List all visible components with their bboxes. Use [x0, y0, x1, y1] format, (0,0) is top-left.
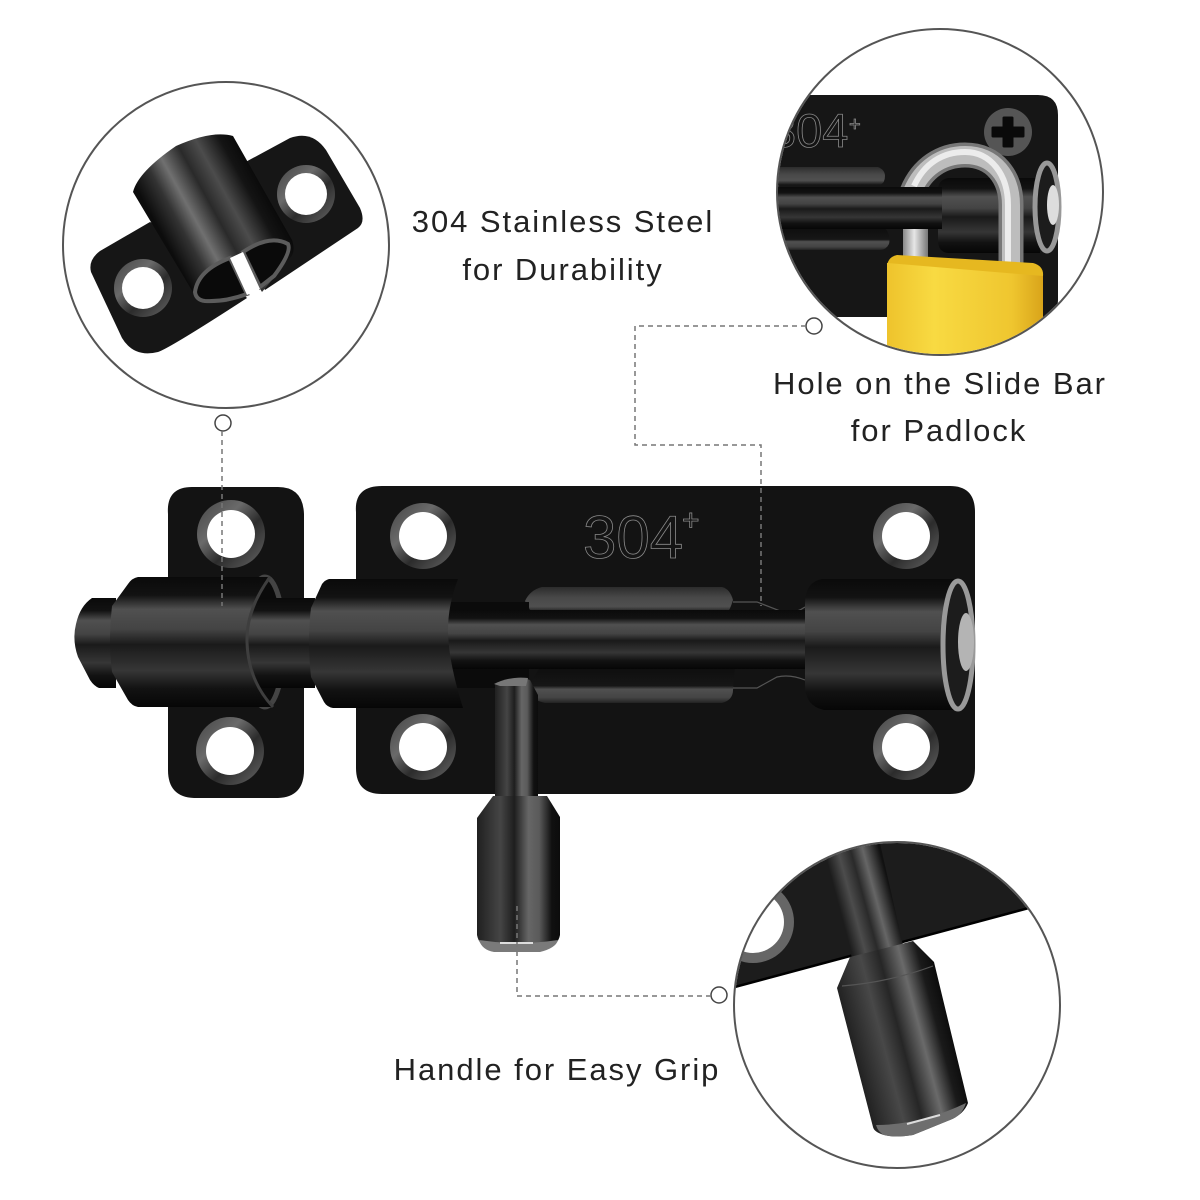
bar end ring close-up	[1035, 163, 1059, 251]
text: stainless steel label: 304 Stainless Steel	[412, 204, 714, 239]
icon: plate hole close-up	[741, 892, 794, 963]
icon: plate hole top left	[390, 503, 456, 569]
lower guide slot	[527, 667, 735, 703]
grip shoulder line	[842, 966, 933, 986]
text: padlock label: for Padlock	[851, 413, 1027, 448]
keeper ring lip	[247, 577, 273, 707]
handle grip close-up	[837, 941, 968, 1136]
slide bar close-up	[770, 187, 942, 229]
text: padlock label: Hole on the Slide Bar	[773, 366, 1107, 401]
bar sleeve close-up	[938, 178, 1040, 253]
upper slot relief line	[733, 602, 805, 612]
keeper tube	[133, 134, 294, 303]
handle stem close-up	[827, 844, 903, 956]
callout connector: keeper	[215, 415, 231, 606]
plate close-up	[770, 95, 1058, 317]
keeper wing right	[240, 136, 363, 290]
panel: detail circle keeper	[63, 82, 389, 408]
handle tip highlight close-up	[907, 1115, 940, 1124]
panel: detail circle handle	[712, 830, 1060, 1168]
plate stamp close-up: 304	[770, 104, 848, 157]
panel: main mounting plate	[356, 486, 975, 794]
padlock body	[887, 263, 1043, 360]
panel: strike plate	[168, 487, 304, 798]
keeper hole left	[114, 259, 172, 317]
plate stamp: 304	[583, 504, 683, 571]
icon: plate hole bottom left	[390, 714, 456, 780]
plate stamp close-up: +	[849, 114, 861, 136]
upper guide slot	[525, 587, 733, 613]
plate close-up	[736, 843, 1027, 986]
handle tip	[479, 940, 558, 952]
handle tip highlight	[500, 942, 533, 944]
handle tip close-up	[876, 1103, 966, 1136]
bolt shaft front	[245, 598, 315, 688]
rear sleeve	[805, 579, 958, 710]
padlock body top	[888, 255, 1044, 276]
handle grip	[477, 796, 560, 948]
keeper hollow	[195, 240, 289, 301]
keeper ring back	[246, 577, 284, 707]
illustration: sliding bolt	[74, 577, 974, 952]
keeper wing left	[90, 222, 247, 353]
callout connector: handle	[517, 906, 727, 1003]
bolt shaft main	[440, 610, 810, 669]
lower slot relief line	[733, 676, 805, 688]
keeper hole right	[277, 165, 335, 223]
icon: plate hole top right	[873, 503, 939, 569]
icon: plate hole bottom right	[873, 714, 939, 780]
plate stamp close-up	[784, 114, 860, 148]
bolt shaft shadow	[445, 602, 529, 688]
plate stamp: +	[682, 504, 700, 537]
handle stem	[495, 678, 538, 800]
keeper slot	[230, 252, 260, 295]
central sleeve	[309, 579, 463, 708]
handle screw	[494, 678, 528, 686]
bolt front collar	[110, 577, 272, 707]
plate edge close-up	[736, 908, 1028, 988]
bolt tip	[74, 598, 116, 688]
rear end cap	[943, 581, 974, 709]
callout connector: padlock	[635, 318, 822, 606]
text: stainless steel label: for Durability	[462, 252, 664, 287]
padlock shackle	[912, 152, 1011, 270]
lower slot close-up	[782, 228, 890, 250]
panel: detail circle padlock	[770, 29, 1103, 360]
icon: screw head	[984, 108, 1032, 156]
text: padlock label	[773, 366, 1107, 448]
text: handle label: Handle for Easy Grip	[394, 1052, 720, 1087]
icon: strike plate lower hole	[196, 717, 264, 785]
upper slot close-up	[770, 167, 885, 185]
icon: strike plate upper hole	[197, 500, 265, 568]
text: stainless steel label	[412, 204, 714, 287]
padlock shackle back leg	[903, 229, 928, 257]
